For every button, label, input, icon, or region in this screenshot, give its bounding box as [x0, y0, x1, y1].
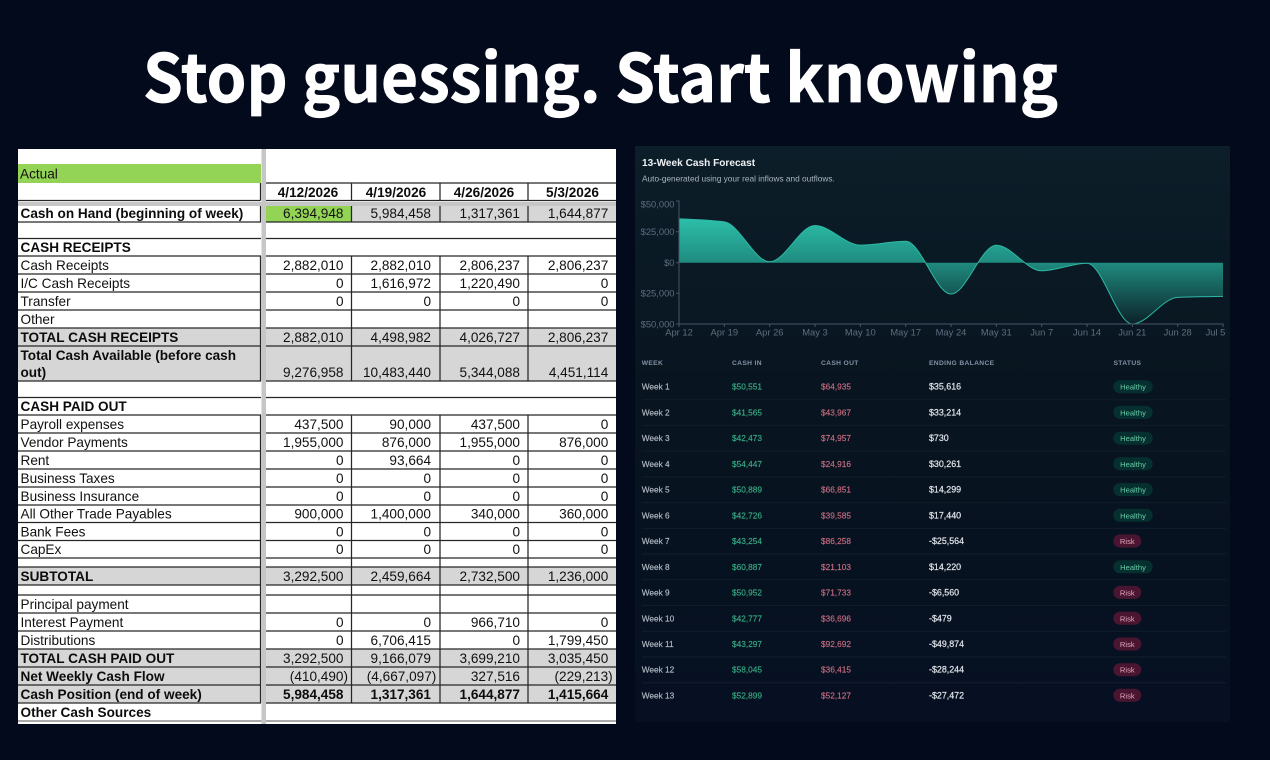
row: net weekly cash flow: (410,490) — [290, 669, 348, 684]
row: capex — [20, 542, 609, 557]
y axis labels: $0 — [664, 257, 674, 268]
row: subtotal — [20, 569, 609, 584]
row: total cash receipts: 2,806,237 — [548, 330, 608, 345]
row: distributions: 0 — [512, 633, 520, 648]
date header: 4/19/2026 — [366, 185, 427, 200]
table row: week 10: $42,777 — [732, 613, 762, 623]
row: trade payables — [20, 506, 609, 522]
table row: week 6 — [642, 509, 1153, 522]
table row: week 4: $24,916 — [821, 459, 851, 469]
row: cash position: 5,984,458 — [283, 687, 344, 702]
row: vendor: Vendor Payments — [20, 435, 128, 450]
chart heading: 13-Week Cash Forecast — [642, 158, 756, 169]
row: cash receipts: 2,806,237 — [548, 258, 608, 273]
table row: week 7: Risk — [1120, 537, 1135, 546]
table row: week 1: $50,551 — [732, 382, 762, 392]
chart heading — [642, 158, 835, 184]
row: I/C cash receipts — [20, 276, 609, 291]
row: total cash available: 4,451,114 — [549, 365, 609, 380]
row: cash receipts: Cash Receipts — [20, 258, 109, 273]
row: distributions: 0 — [336, 633, 344, 648]
table row: week 11: -$49,874 — [929, 639, 964, 649]
row: cash receipts: 2,882,010 — [283, 258, 344, 273]
table row: week 5: $50,889 — [732, 485, 762, 495]
table row: week 11: Week 11 — [642, 639, 674, 649]
row: cash receipts: 2,882,010 — [371, 258, 431, 273]
row: cash position — [20, 687, 609, 702]
row: total cash paid out — [20, 651, 609, 666]
table row: week 3: $74,957 — [821, 433, 851, 443]
row: subtotal: 2,459,664 — [371, 569, 431, 584]
row: interest: 966,710 — [471, 615, 520, 630]
x axis labels: May 24 — [936, 327, 966, 338]
table row: week 2: $43,967 — [821, 407, 851, 417]
row: business taxes: 0 — [336, 471, 344, 486]
x axis labels: Jun 28 — [1164, 327, 1192, 338]
table row: week 4 — [642, 457, 1153, 470]
table row: week 13: Risk — [1120, 691, 1135, 700]
table row: week 7 — [642, 534, 1141, 548]
row: trade payables: 360,000 — [559, 506, 609, 522]
x axis labels — [665, 327, 1225, 338]
table row separators — [642, 400, 1226, 683]
row: business insurance: 0 — [601, 489, 609, 504]
row: total cash available: Total Cash Available (before cash — [20, 348, 236, 363]
row: rent: 0 — [336, 453, 344, 468]
table row: week 3: $42,473 — [732, 433, 762, 443]
row: capex: 0 — [512, 542, 520, 557]
row: vendor — [20, 435, 609, 450]
row: business taxes: Business Taxes — [20, 471, 115, 486]
x axis labels: Apr 19 — [710, 327, 738, 338]
row: I/C cash receipts: 0 — [336, 276, 344, 291]
row: cash receipts: 2,806,237 — [460, 258, 520, 273]
table row: week 3: Healthy — [1120, 434, 1146, 443]
row: net weekly cash flow: 327,516 — [471, 669, 520, 684]
row: business taxes: 0 — [512, 471, 520, 486]
row: business taxes: 0 — [601, 471, 609, 486]
table row: week 2: Healthy — [1120, 408, 1146, 417]
panel: 13-week forecast dashboard — [635, 146, 1230, 722]
row: rent: 0 — [601, 453, 609, 468]
table row: week 8: $60,887 — [732, 562, 762, 572]
row: other: Other — [20, 312, 55, 327]
table row: week 9: -$6,560 — [929, 587, 959, 597]
y axis labels: $25,000 — [641, 226, 674, 237]
row: net weekly cash flow: (229,213) — [554, 669, 613, 684]
table row: week 6: Healthy — [1120, 511, 1146, 520]
x axis labels: May 3 — [802, 327, 828, 338]
table row: week 6: $39,585 — [821, 510, 851, 520]
y axis labels: $50,000 — [641, 318, 674, 329]
table row: week 7: $86,258 — [821, 536, 851, 546]
row: total cash paid out: 3,292,500 — [283, 651, 344, 666]
row: total cash paid out: 9,166,079 — [371, 651, 431, 666]
table row: week 11 — [642, 638, 1141, 650]
table row: week 5: Week 5 — [642, 485, 670, 495]
table header: CASH OUT — [821, 360, 859, 367]
table row: week 1 — [642, 380, 1153, 393]
table row: week 13: $52,899 — [732, 690, 762, 700]
table row: week 4: $30,261 — [929, 459, 961, 469]
row: vendor: 876,000 — [559, 435, 609, 450]
table row: week 11: Risk — [1120, 640, 1135, 649]
date header: 4/26/2026 — [454, 185, 515, 200]
table row: week 10: Risk — [1120, 614, 1135, 623]
chart heading: Auto-generated using your real inflows and outflows. — [642, 174, 835, 184]
table row: week 12: Risk — [1120, 666, 1135, 675]
row: total cash available: out) — [20, 365, 46, 380]
table header: CASH IN — [732, 360, 762, 367]
table row: week 12: -$28,244 — [929, 665, 964, 675]
x axis labels: Apr 26 — [756, 327, 784, 338]
table row: week 10: -$479 — [929, 613, 952, 623]
row: I/C cash receipts: 0 — [601, 276, 609, 291]
table header: WEEK — [642, 360, 663, 367]
row: cash position: 1,644,877 — [460, 687, 520, 702]
table row: week 3: $730 — [929, 433, 949, 443]
row: payroll — [20, 417, 609, 432]
row: net weekly cash flow — [20, 669, 613, 684]
table row: week 13: Week 13 — [642, 690, 675, 700]
row: total cash receipts: TOTAL CASH RECEIPTS — [20, 330, 178, 345]
table row: week 1: $64,935 — [821, 382, 851, 392]
table row: week 11: $92,692 — [821, 639, 851, 649]
heading: cash receipts: CASH RECEIPTS — [20, 240, 131, 255]
table row: week 8: $14,220 — [929, 562, 961, 572]
row: vendor: 1,955,000 — [460, 435, 520, 450]
row: I/C cash receipts: 1,220,490 — [460, 276, 520, 291]
table header — [642, 360, 1142, 367]
row: payroll: 437,500 — [294, 417, 344, 432]
x axis labels: Jun 21 — [1118, 327, 1146, 338]
row: business insurance: 0 — [512, 489, 520, 504]
row: bank fees: 0 — [512, 524, 520, 540]
table row: week 1: Week 1 — [642, 382, 670, 392]
row: cash on hand: Cash on Hand (beginning of week) — [20, 206, 243, 221]
row: distributions: Distributions — [20, 633, 95, 648]
row: distributions: 6,706,415 — [371, 633, 431, 648]
row: subtotal: SUBTOTAL — [20, 569, 93, 584]
row: cash position: Cash Position (end of week) — [20, 687, 202, 702]
table row: week 13 — [642, 689, 1141, 702]
row: principal: Principal payment — [20, 597, 129, 612]
table row: week 8: $21,103 — [821, 562, 851, 572]
table row: week 9: $71,733 — [821, 587, 851, 597]
table row: week 5: Healthy — [1120, 486, 1146, 495]
spreadsheet grid — [18, 183, 616, 721]
table row: week 2: $33,214 — [929, 407, 961, 417]
y axis labels: $25,000 — [641, 288, 674, 299]
x axis labels: Apr 12 — [665, 327, 693, 338]
row: total cash paid out: 3,035,450 — [548, 651, 609, 666]
row: business insurance: 0 — [336, 489, 344, 504]
table row: week 9: Week 9 — [642, 587, 670, 597]
row: trade payables: 340,000 — [471, 506, 520, 522]
row: I/C cash receipts: I/C Cash Receipts — [20, 276, 130, 291]
row: net weekly cash flow: Net Weekly Cash Flow — [20, 669, 165, 684]
row: payroll: 0 — [601, 417, 609, 432]
table row: week 11: $43,297 — [732, 639, 762, 649]
row: cash position: 1,415,664 — [548, 687, 609, 702]
table row: week 2 — [642, 406, 1153, 419]
row: bank fees: 0 — [423, 524, 431, 540]
row: subtotal: 2,732,500 — [460, 569, 520, 584]
table header: STATUS — [1114, 360, 1142, 367]
table row: week 3: Week 3 — [642, 433, 670, 443]
row: cash on hand: 1,644,877 — [548, 206, 608, 221]
row: capex: 0 — [601, 542, 609, 557]
row: bank fees — [20, 524, 609, 540]
table row: week 8: Week 8 — [642, 562, 670, 572]
row: bank fees: Bank Fees — [20, 524, 86, 540]
row: cash on hand — [20, 206, 608, 221]
table row: week 7: $43,254 — [732, 536, 762, 546]
row: total cash available — [20, 348, 609, 380]
table row: week 3 — [642, 432, 1153, 445]
row: bank fees: 0 — [336, 524, 344, 540]
row: vendor: 1,955,000 — [283, 435, 344, 450]
label: Actual — [18, 164, 261, 183]
table header: ENDING BALANCE — [929, 360, 995, 367]
table row: week 6: $42,726 — [732, 510, 762, 520]
x axis labels: May 31 — [981, 327, 1012, 338]
table row: week 7: -$25,564 — [929, 536, 964, 546]
row: rent: Rent — [20, 453, 49, 468]
row: business insurance: 0 — [423, 489, 431, 504]
table row: week 8: Healthy — [1120, 563, 1146, 572]
table row: week 13: -$27,472 — [929, 690, 964, 700]
table row: week 6: $17,440 — [929, 510, 961, 520]
grey column divider — [18, 149, 616, 724]
table row: week 6: Week 6 — [642, 510, 670, 520]
row: capex: 0 — [423, 542, 431, 557]
date header — [278, 185, 599, 200]
row: total cash available: 5,344,088 — [460, 365, 520, 380]
row: total cash receipts: 2,882,010 — [283, 330, 344, 345]
table row: week 7: Week 7 — [642, 536, 670, 546]
table row: week 2: Week 2 — [642, 407, 670, 417]
table row: week 4: Healthy — [1120, 460, 1146, 469]
row: total cash available: 10,483,440 — [363, 365, 431, 380]
row: business taxes — [20, 471, 609, 486]
x axis labels: Jun 14 — [1073, 327, 1101, 338]
table row: week 12 — [642, 663, 1141, 676]
row: trade payables: 1,400,000 — [371, 506, 431, 522]
row: net weekly cash flow: (4,667,097) — [367, 669, 436, 684]
row: payroll: Payroll expenses — [20, 417, 124, 432]
row: total cash receipts — [20, 330, 608, 345]
row: payroll: 437,500 — [471, 417, 520, 432]
x axis labels: Jul 5 — [1206, 327, 1225, 338]
y axis labels: $50,000 — [641, 198, 674, 209]
table row: week 10: $36,696 — [821, 613, 851, 623]
row: transfer: 0 — [423, 294, 431, 309]
row: vendor: 876,000 — [382, 435, 431, 450]
row: rent: 93,664 — [389, 453, 431, 468]
table row: week 5: $66,851 — [821, 485, 851, 495]
table row: week 9 — [642, 586, 1141, 599]
table row: week 2: $41,565 — [732, 407, 762, 417]
x axis labels: May 17 — [890, 327, 921, 338]
heading: cash paid out: CASH PAID OUT — [20, 399, 127, 414]
date header: 5/3/2026 — [546, 185, 599, 200]
row: transfer: 0 — [512, 294, 520, 309]
row: rent: 0 — [512, 453, 520, 468]
row: subtotal: 3,292,500 — [283, 569, 344, 584]
row: distributions — [20, 633, 609, 648]
row: I/C cash receipts: 1,616,972 — [371, 276, 431, 291]
row: interest: 0 — [423, 615, 431, 630]
row: capex: 0 — [336, 542, 344, 557]
row: business insurance: Business Insurance — [20, 489, 139, 504]
row: cash receipts — [20, 258, 608, 273]
row: interest: Interest Payment — [20, 615, 123, 630]
panel: cash flow spreadsheet — [18, 149, 616, 724]
table row: week 8 — [642, 560, 1153, 573]
table row: week 4: Week 4 — [642, 459, 670, 469]
row: transfer — [20, 294, 609, 309]
row: total cash paid out: TOTAL CASH PAID OUT — [20, 651, 175, 666]
row: rent — [20, 453, 609, 468]
row: distributions: 1,799,450 — [548, 633, 609, 648]
table row: week 5 — [642, 483, 1153, 496]
x axis labels: May 10 — [845, 327, 876, 338]
x axis labels: Jun 7 — [1030, 327, 1053, 338]
table row: week 1: $35,616 — [929, 382, 961, 392]
row: transfer: 0 — [336, 294, 344, 309]
table row: week 9: $50,952 — [732, 587, 762, 597]
area chart — [676, 201, 1223, 327]
title: Stop guessing. Start knowing — [143, 26, 1058, 122]
label: Actual: Actual — [20, 166, 58, 182]
table row: week 13: $52,127 — [821, 690, 851, 700]
table row: week 12: Week 12 — [642, 665, 675, 675]
table row: week 10: Week 10 — [642, 613, 675, 623]
row: other cash sources: Other Cash Sources — [20, 705, 151, 720]
table row: week 10 — [642, 612, 1141, 625]
table row: week 4: $54,447 — [732, 459, 762, 469]
row: total cash paid out: 3,699,210 — [460, 651, 520, 666]
row: interest: 0 — [601, 615, 609, 630]
row: subtotal: 1,236,000 — [548, 569, 609, 584]
table row: week 1: Healthy — [1120, 383, 1146, 392]
row: cash on hand: 6,394,948 — [283, 206, 344, 221]
row: transfer: 0 — [601, 294, 609, 309]
row: trade payables: 900,000 — [294, 506, 344, 522]
row: cash on hand: 1,317,361 — [460, 206, 520, 221]
row: payroll: 90,000 — [389, 417, 431, 432]
table row: week 12: $36,415 — [821, 665, 851, 675]
row: cash on hand: 5,984,458 — [371, 206, 431, 221]
row: interest — [20, 615, 609, 630]
row: trade payables: All Other Trade Payables — [20, 506, 172, 522]
row: transfer: Transfer — [20, 294, 71, 309]
row: cash position: 1,317,361 — [371, 687, 431, 702]
row: business taxes: 0 — [423, 471, 431, 486]
grey and green cell fills — [18, 206, 616, 703]
table row: week 12: $58,045 — [732, 665, 762, 675]
date header: 4/12/2026 — [278, 185, 339, 200]
y axis labels — [641, 198, 674, 329]
table row: week 5: $14,299 — [929, 485, 961, 495]
row: bank fees: 0 — [601, 524, 609, 540]
row: total cash available: 9,276,958 — [283, 365, 344, 380]
row: total cash receipts: 4,498,982 — [371, 330, 431, 345]
row: total cash receipts: 4,026,727 — [460, 330, 520, 345]
row: capex: CapEx — [20, 542, 62, 557]
table row: week 9: Risk — [1120, 588, 1135, 597]
row: business insurance — [20, 489, 609, 504]
row: interest: 0 — [336, 615, 344, 630]
